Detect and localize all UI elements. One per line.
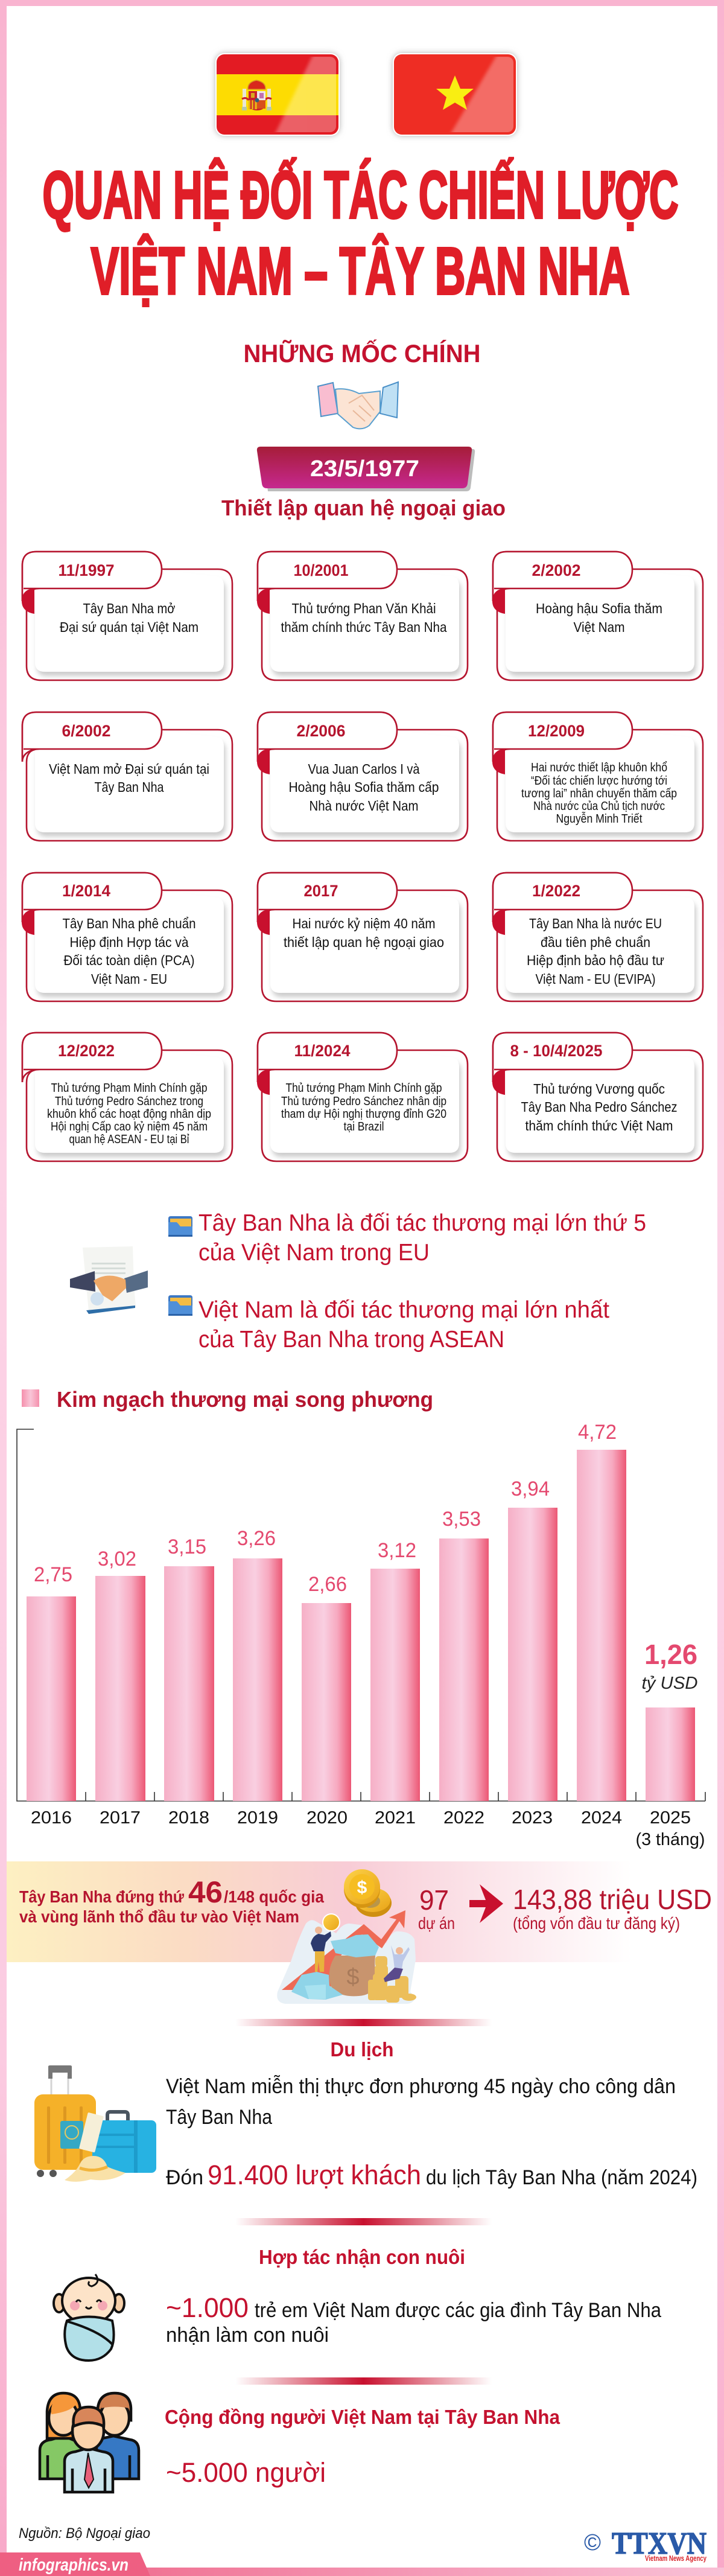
bar chart: 2020 [306,1808,348,1828]
source: Nguồn: Bộ Ngoại giao [19,2525,150,2542]
illustration: investment growth: $ [346,1965,360,1990]
icon: folder 1 [168,1216,192,1237]
card 2017 [257,873,468,1001]
bar chart: 2016 [31,1808,72,1828]
logo: TTXVN: TTXVN [612,2527,707,2561]
card 2/2006: 2/2006 [297,722,345,740]
card 11/1997: 11/1997 [58,561,115,579]
bar chart: 3,02 [98,1548,136,1570]
text: Spain ranks 46/148: và vùng lãnh thổ đầu tư vào Việt Nam [19,1907,299,1926]
card 2017: Hai nước kỷ niệm 40 năm [292,916,436,931]
bar chart: 2022 [443,1808,484,1828]
text: 143.88 million USD: (tổng vốn đầu tư đăng ký) [513,1914,680,1933]
bar chart: 2019 [237,1808,278,1828]
card 11/2024: Thủ tướng Phạm Minh Chính gặp [286,1082,442,1095]
bar chart: tỷ USD [642,1674,698,1693]
title [42,158,678,308]
heading: adoption: Hợp tác nhận con nuôi [259,2246,465,2268]
text: 5000 people: ~5.000 người [166,2457,326,2488]
card 12/2022: Thủ tướng Phạm Minh Chính gặp [51,1082,208,1095]
card 1/2022: Tây Ban Nha là nước EU [529,916,662,931]
heading: tourism: Du lịch [331,2038,393,2061]
icon: Spain flag [215,53,344,139]
heading: Vietnamese community: Cộng đồng người Việt Nam tại Tây Ban Nha [165,2406,560,2428]
icon: handshake [318,382,398,429]
card 10/2001: Thủ tướng Phan Văn Khải [292,601,436,616]
icon: signed agreement handshake [70,1246,148,1314]
card 2/2006: Nhà nước Việt Nam [309,798,419,814]
card 12/2009 [492,712,703,841]
card 1/2014: Hiệp định Hợp tác và [70,934,189,950]
card 8-10/4/2025: 8 - 10/4/2025 [510,1042,602,1060]
card 2/2002 [492,552,703,680]
card 8-10/4/2025: thăm chính thức Việt Nam [525,1118,673,1133]
text: Vietnam is largest partner in ASEAN [198,1297,609,1353]
card 2017: 2017 [304,882,338,900]
bar chart: 3,94 [511,1478,550,1500]
text: visa exemption: Việt Nam miễn thị thực đơn phương 45 ngày cho công dân [166,2075,676,2098]
card 1/2014 [22,873,232,1001]
bar chart: 3,12 [378,1539,416,1562]
card 1/2014: 1/2014 [62,882,110,900]
card 2/2006: Vua Juan Carlos I và [308,761,420,777]
card 2/2002: 2/2002 [532,561,580,579]
card 12/2022 [22,1033,232,1161]
logo: TTXVN: © [584,2530,601,2555]
heading: key milestones: NHỮNG MỐC CHÍNH [244,339,480,368]
bar chart: 3,26 [237,1527,276,1550]
text: Spain ranks 46/148: /148 quốc gia [224,1887,324,1906]
card 1/2014: Đối tác toàn diện (PCA) [64,952,194,968]
text: 91,400 visitors: du lịch Tây Ban Nha (năm 2024) [426,2166,697,2189]
card 2/2002: Việt Nam [573,619,625,635]
bar chart: 2,75 [34,1563,72,1586]
card 12/2009: tương lai” nhân chuyến thăm cấp [521,787,677,800]
text: visa exemption: Tây Ban Nha [166,2106,272,2129]
card 6/2002: Tây Ban Nha [94,779,164,795]
icon: baby [54,2274,124,2361]
text: 91,400 visitors: 91.400 lượt khách [208,2160,421,2190]
card 12/2009: Nhà nước của Chủ tịch nước [533,800,665,813]
icon: people [40,2393,139,2492]
bar chart: 2,66 [308,1573,347,1596]
text: 97 projects: dự án [418,1914,455,1933]
card 1/2022: đầu tiên phê chuẩn [541,934,650,950]
text: visa exemption [166,2075,676,2129]
card 8-10/4/2025 [492,1033,703,1161]
text: Spain ranks 46/148: Tây Ban Nha đứng thứ [19,1887,185,1906]
card 11/2024: 11/2024 [294,1042,350,1060]
text: Spain is 5th largest partner: Tây Ban Nha là đối tác thương mại lớn thứ 5 [198,1210,646,1236]
card 8-10/4/2025: Thủ tướng Vương quốc [533,1081,665,1097]
text: Vietnam is largest partner in ASEAN: của Tây Ban Nha trong ASEAN [198,1327,504,1353]
card 11/1997: Tây Ban Nha mở [83,601,175,616]
date banner: 23/5/1977 [310,456,419,482]
card 11/2024: tham dự Hội nghị thượng đỉnh G20 [281,1108,446,1121]
card 1/2022: 1/2022 [532,882,580,900]
card 2/2006 [257,712,468,841]
text: 97 projects: 97 [419,1884,449,1916]
text: 143.88 million USD [513,1884,712,1933]
text: Spain is 5th largest partner [198,1210,646,1266]
card 12/2022: Thủ tướng Pedro Sánchez trong [55,1095,203,1108]
text: Vietnam is largest partner in ASEAN: Việt Nam là đối tác thương mại lớn nhất [198,1297,609,1323]
card 12/2022: quan hệ ASEAN - EU tại Bỉ [69,1133,189,1146]
text: Spain is 5th largest partner: của Việt Nam trong EU [198,1240,430,1266]
date banner [257,447,475,491]
card 2/2002: Hoàng hậu Sofia thăm [536,601,662,616]
card 10/2001: 10/2001 [293,561,349,579]
card 11/1997: Đại sứ quán tại Việt Nam [60,619,198,635]
logo: TTXVN [584,2527,707,2563]
text: 97 projects [418,1884,455,1933]
text: 1000 children adopted: ~1.000 [166,2292,249,2323]
card 11/1997 [22,552,232,680]
card 2017: thiết lập quan hệ ngoại giao [284,934,444,950]
footer bar: infographics.vn [19,2555,129,2575]
card 1/2022: Việt Nam - EU (EVIPA) [536,971,655,987]
text: 1000 children adopted: trẻ em Việt Nam được các gia đình Tây Ban Nha [255,2299,661,2322]
icon: luggage [34,2065,156,2182]
bar chart: 3,53 [442,1508,481,1531]
card 1/2022 [492,873,703,1001]
arrow [469,1884,503,1923]
card 6/2002: Việt Nam mở Đại sứ quán tại [49,761,209,777]
text: 1000 children adopted: nhận làm con nuôi [166,2324,329,2347]
card 12/2009: Hai nước thiết lập khuôn khổ [531,761,667,774]
icon: folder 2 [168,1295,192,1316]
card 6/2002: 6/2002 [62,722,111,740]
card 10/2001: thăm chính thức Tây Ban Nha [281,619,447,635]
bar chart: (3 tháng) [636,1830,705,1849]
bar chart: 4,72 [578,1421,617,1444]
card 12/2009: 12/2009 [528,722,585,740]
bar chart [17,1421,705,1849]
bar chart: 2018 [168,1808,209,1828]
text: 1000 children adopted [166,2292,661,2347]
card 11/2024: Thủ tướng Pedro Sánchez nhân dịp [281,1095,446,1108]
caption: diplomatic relations: Thiết lập quan hệ ngoại giao [221,496,506,520]
card 12/2009: Nguyễn Minh Triết [556,812,643,826]
chart heading: Kim ngạch thương mại song phương [57,1387,433,1412]
card 12/2022: khuôn khổ các hoạt động nhân dịp [47,1108,211,1121]
card 12/2022: Hội nghị Cấp cao kỷ niệm 45 năm [51,1120,208,1133]
footer bar [0,2552,724,2576]
card 1/2022: Hiệp định bảo hộ đầu tư [527,952,664,968]
icon: Vietnam flag [393,53,519,139]
text: 143.88 million USD: 143,88 triệu USD [513,1884,712,1915]
card 12/2009: “Đối tác chiến lược hướng tới [531,774,667,788]
text: 91,400 visitors: Đón [166,2166,203,2189]
icon: gold coins [344,1869,392,1917]
card 10/2001 [257,552,468,680]
icon: gold coins: $ [357,1878,367,1898]
card 1/2014: Việt Nam - EU [91,971,167,987]
text: Spain ranks 46/148: 46 [188,1875,223,1909]
card 8-10/4/2025: Tây Ban Nha Pedro Sánchez [521,1099,677,1115]
bar chart: 3,15 [168,1535,206,1558]
bar chart: 2017 [100,1808,141,1828]
card 12/2022: 12/2022 [58,1042,115,1060]
bar chart: 2024 [581,1808,622,1828]
illustration: investment growth [277,1910,416,2004]
card 2/2006: Hoàng hậu Sofia thăm cấp [288,779,439,795]
bar chart: 1,26 [644,1639,697,1670]
bar chart: 2023 [512,1808,553,1828]
card 11/2024: tại Brazil [344,1120,384,1133]
bar chart: 2025 [650,1808,691,1828]
text: 91,400 visitors [166,2160,697,2190]
bar chart: 2021 [375,1808,416,1828]
text: Spain ranks 46/148 [19,1875,324,1926]
card 11/2024 [257,1033,468,1161]
investment band [7,1861,717,1962]
card 1/2014: Tây Ban Nha phê chuẩn [63,916,195,931]
card 6/2002 [22,712,232,841]
